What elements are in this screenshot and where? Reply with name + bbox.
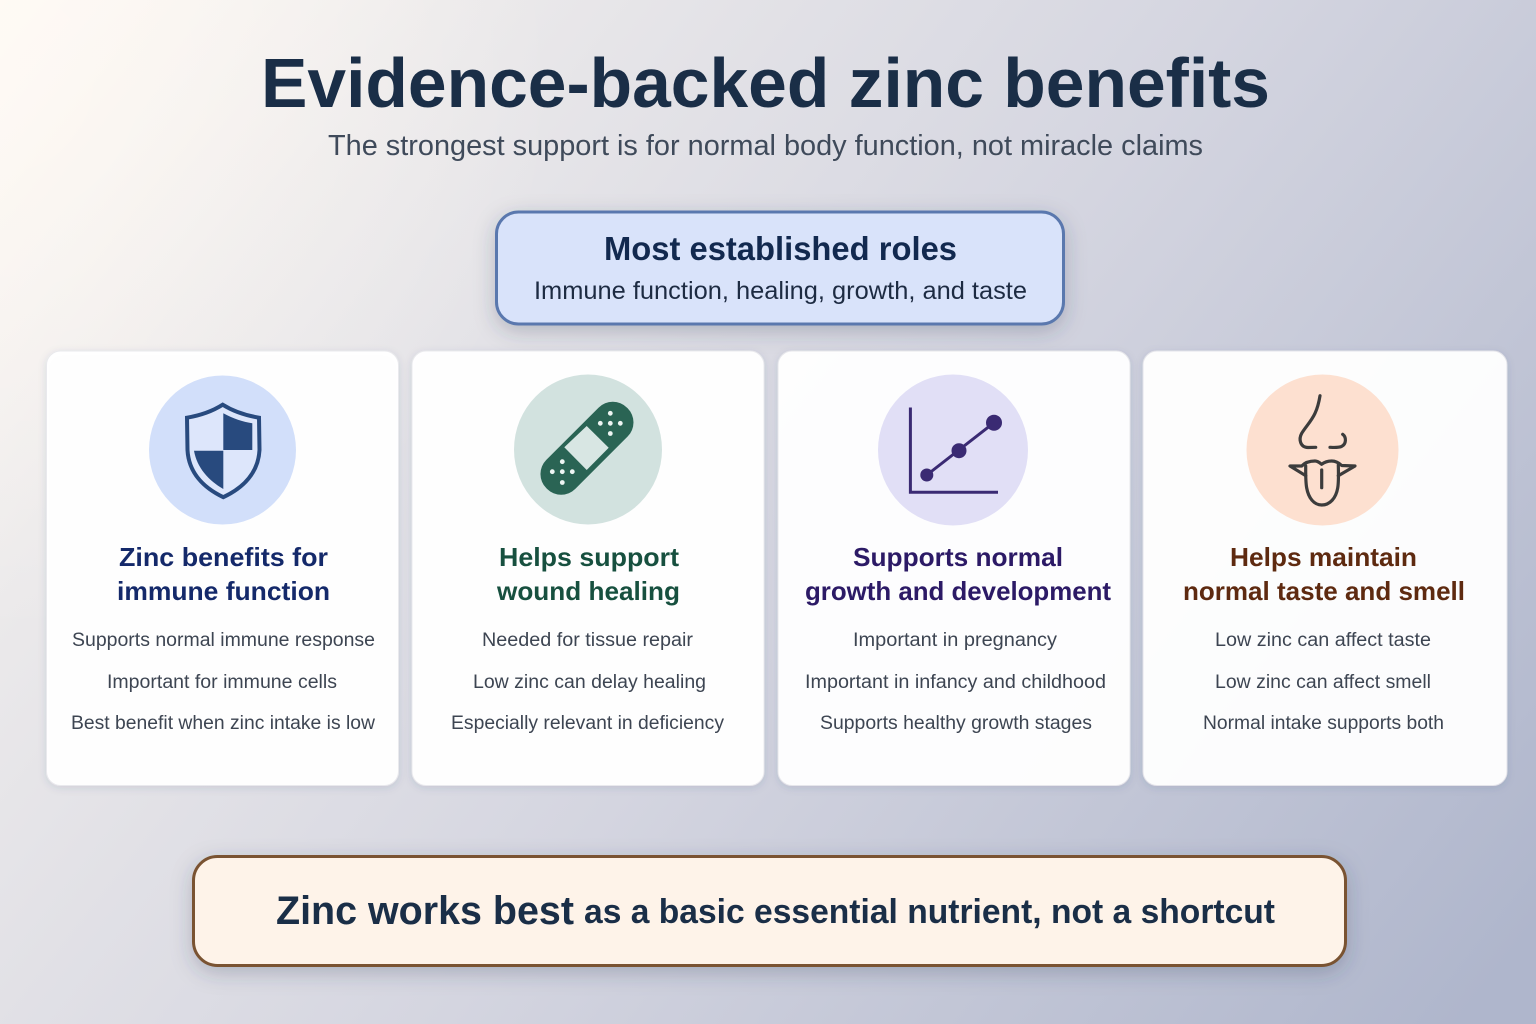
heading: Helps maintain (1230, 542, 1417, 572)
benefit list (805, 630, 1106, 734)
benefit list: Low zinc can affect smell (1215, 672, 1431, 693)
benefit list: Best benefit when zinc intake is low (71, 713, 375, 734)
icon: shield (149, 376, 296, 524)
benefit list: Important in pregnancy (853, 630, 1058, 651)
panel: growth and development (778, 351, 1130, 786)
benefit list: Important in infancy and childhood (805, 672, 1106, 693)
heading: Helps support (499, 542, 679, 572)
icon: growth chart (878, 374, 1028, 526)
callout: bottom takeaway (194, 856, 1346, 966)
benefit list (451, 630, 725, 734)
benefit list: Supports normal immune response (72, 630, 375, 651)
title: Evidence-backed zinc benefits (261, 44, 1270, 122)
heading: wound healing (496, 576, 680, 606)
panel: taste and smell (1143, 351, 1507, 786)
callout: most established roles (496, 212, 1064, 324)
benefit list: Low zinc can delay healing (473, 672, 706, 693)
benefit list: Especially relevant in deficiency (451, 713, 725, 734)
heading: Zinc benefits for (119, 542, 328, 572)
benefit list (71, 630, 375, 734)
heading (805, 542, 1111, 606)
callout heading: Most established roles (604, 230, 957, 267)
heading: normal taste and smell (1183, 576, 1465, 606)
benefit list: Supports healthy growth stages (820, 713, 1092, 734)
callout text: Immune function, healing, growth, and taste (534, 277, 1027, 305)
heading: immune function (117, 576, 330, 606)
takeaway text (276, 889, 1275, 933)
benefit list: Needed for tissue repair (482, 630, 694, 651)
icon: bandage (514, 374, 662, 524)
takeaway text: Zinc works best (276, 889, 574, 933)
subtitle: The strongest support is for normal body function, not miracle claims (328, 130, 1203, 162)
benefit list: Normal intake supports both (1203, 713, 1444, 734)
panel: immune function (46, 351, 398, 786)
heading: Supports normal (853, 542, 1063, 572)
heading (1183, 542, 1465, 606)
heading (496, 542, 680, 606)
panel: wound healing (412, 351, 764, 786)
benefit list: Low zinc can affect taste (1215, 630, 1431, 651)
benefit list: Important for immune cells (107, 672, 337, 693)
icon: nose and tongue (1246, 374, 1398, 526)
benefit list (1203, 630, 1444, 734)
takeaway text: as a basic essential nutrient, not a shortcut (584, 893, 1275, 931)
heading (117, 542, 330, 606)
heading: growth and development (805, 576, 1111, 606)
